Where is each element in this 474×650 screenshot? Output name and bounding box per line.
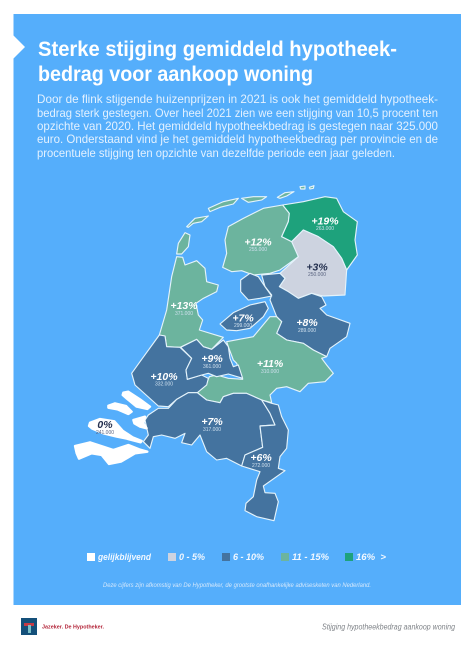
label: Friesland: 255.000 xyxy=(249,247,267,253)
legend item: 6-10%: 6 - 10% xyxy=(233,552,265,563)
label: Drenthe: 250.000 xyxy=(308,272,326,278)
title: Sterke stijging gemiddeld hypotheek- xyxy=(38,38,397,61)
province: Zuid-Holland xyxy=(132,335,208,407)
label: Noord-Holland: 371.000 xyxy=(175,311,193,317)
Wadden islands xyxy=(177,186,314,254)
province: Utrecht xyxy=(181,339,243,379)
legend item: 0-5% xyxy=(168,552,206,563)
label: Limburg xyxy=(250,452,272,469)
source note: Deze cijfers zijn afkomstig van De Hypotheker, de grootste onafhankelijke advisesketen van Nederland. xyxy=(103,583,371,589)
intro text block: bedrag sterk gestegen. Over heel 2021 zien we een stijging van 10,5 procent ten xyxy=(37,106,438,120)
label: Limburg: +6% xyxy=(250,452,272,464)
province: Groningen xyxy=(282,197,357,270)
footer brand text: Jazeker. De Hypotheker. xyxy=(42,624,104,630)
label: Friesland: +12% xyxy=(244,236,272,248)
legend xyxy=(87,552,386,563)
province: Overijssel xyxy=(262,273,350,357)
northern provinces and Wadden islands xyxy=(177,186,357,357)
province: Flevoland xyxy=(220,273,272,331)
southern provinces xyxy=(75,317,333,521)
label: Flevoland: 299.000 xyxy=(234,323,252,329)
label: Groningen: 263.000 xyxy=(316,226,334,232)
label: Overijssel: +8% xyxy=(296,317,318,329)
title: bedrag voor aankoop woning xyxy=(38,63,313,86)
province: Friesland xyxy=(223,205,298,275)
label: Zuid-Holland: +10% xyxy=(150,371,178,383)
label: Noord-Brabant: 317.000 xyxy=(203,427,221,433)
label: Overijssel xyxy=(296,317,318,334)
map: Netherlands provinces xyxy=(75,186,357,521)
intro text block: procentuele stijging ten opzichte van dezelfde periode een jaar geleden. xyxy=(37,146,395,160)
province: Noord-Brabant xyxy=(143,393,275,466)
intro text block: euro. Onderstaand vind je het gemiddeld hypotheekbedrag per provincie en de xyxy=(37,132,438,146)
label: Zeeland: 0% xyxy=(97,419,113,431)
legend item: 11-15%: 11 - 15% xyxy=(292,552,330,563)
legend item: unchanged: gelijkblijvend xyxy=(97,552,151,563)
footer logo xyxy=(21,618,37,635)
label: Limburg: 272.000 xyxy=(252,463,270,469)
label: Gelderland xyxy=(257,358,284,375)
label: Noord-Brabant xyxy=(201,416,223,433)
label: Overijssel: 289.000 xyxy=(298,328,316,334)
intro text block xyxy=(37,92,438,160)
legend item: 16% and up: 16% > xyxy=(356,552,386,563)
province: Gelderland xyxy=(197,317,333,403)
label: Zeeland: 241.000 xyxy=(96,430,114,436)
province: Noord-Holland xyxy=(159,257,223,349)
label: Zuid-Holland: 332.000 xyxy=(155,382,173,388)
intro text block: opzichte van 2020. Het gemiddeld hypotheekbedrag is gestegen naar 325.000 xyxy=(37,119,438,133)
label: Noord-Holland xyxy=(170,300,198,317)
label: Utrecht: +9% xyxy=(201,353,223,365)
title xyxy=(38,38,397,86)
label: Flevoland: +7% xyxy=(232,312,254,324)
label: Drenthe: +3% xyxy=(306,262,328,274)
province: Drenthe xyxy=(279,230,347,298)
legend item: 0-5%: 0 - 5% xyxy=(179,552,206,563)
label: Gelderland: +11% xyxy=(257,358,284,370)
label: Utrecht: 361.000 xyxy=(203,364,221,370)
icon: white notch arrow xyxy=(13,35,25,59)
label: Utrecht xyxy=(201,353,223,370)
label: Noord-Holland: +13% xyxy=(170,300,198,312)
label: Noord-Brabant: +7% xyxy=(201,416,223,428)
province: Limburg xyxy=(242,400,288,521)
label: Zeeland xyxy=(96,419,114,436)
label: Gelderland: 310.000 xyxy=(261,369,279,375)
label: Groningen: +19% xyxy=(311,216,339,228)
intro text block: Door de flink stijgende huizenprijzen in 2021 is ook het gemiddeld hypotheek- xyxy=(37,92,438,106)
province: Zeeland xyxy=(75,392,150,464)
